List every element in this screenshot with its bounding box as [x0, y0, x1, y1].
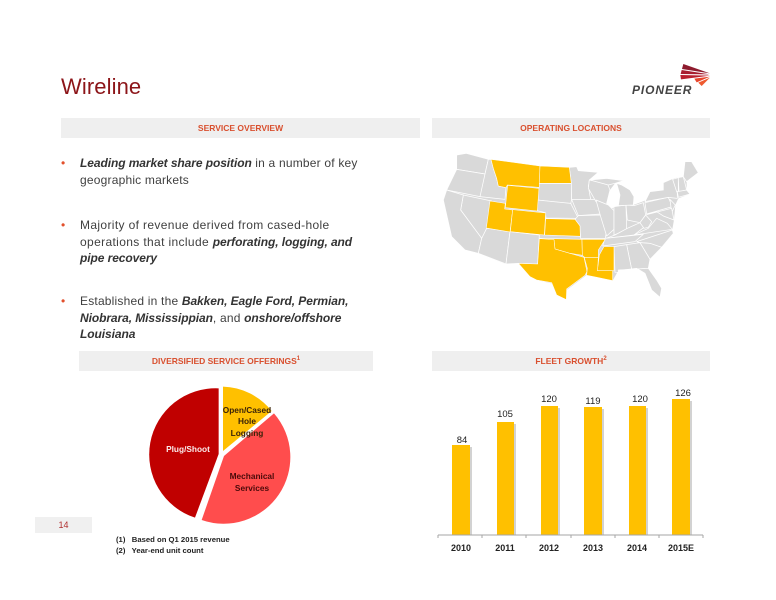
bar chart: fleet growth: 2012: [539, 543, 559, 553]
bar chart: fleet growth: 2013: [583, 543, 603, 553]
heading: service overview: SERVICE OVERVIEW: [198, 123, 283, 133]
bar chart: fleet growth: 2010: [451, 543, 471, 553]
bar chart: fleet growth: 2011: [495, 543, 515, 553]
footnotes: [116, 535, 230, 555]
pie chart: diversified service offerings: Open/Cased: [223, 405, 271, 415]
bar chart: fleet growth: 120: [541, 394, 557, 405]
pie chart: diversified service offerings: Plug/Shoot: [166, 444, 210, 454]
bar chart: fleet growth: 105: [497, 409, 513, 420]
footnotes: (1) Based on Q1 2015 revenue: [116, 535, 230, 544]
heading: diversified service offerings: DIVERSIFIED SERVICE OFFERINGS1: [152, 356, 300, 366]
bullet list: service overview: Majority of revenue derived from cased-hole: [80, 218, 330, 232]
pie chart: diversified service offerings: Services: [235, 483, 269, 493]
heading: diversified service offerings: [79, 351, 373, 371]
bullet list: service overview: operations that include perforating, logging, and: [80, 234, 352, 248]
bar chart: fleet growth: 84: [457, 435, 467, 446]
bar chart: fleet growth: 2015E: [668, 543, 694, 553]
bullet list: service overview: •: [61, 294, 65, 308]
pie chart: diversified service offerings: Mechanical: [230, 471, 274, 481]
bullet list: service overview: pipe recovery: [80, 251, 157, 265]
heading: service overview: [61, 118, 420, 138]
bullet list: service overview: Established in the Bakken, Eagle Ford, Permian,: [80, 294, 348, 308]
bullet list: service overview: Niobrara, Mississippian, and onshore/offshore: [80, 310, 341, 324]
bullet list: service overview: •: [61, 156, 65, 170]
bar chart: fleet growth: 126: [675, 388, 691, 399]
page number: [35, 517, 92, 533]
heading: fleet growth: FLEET GROWTH2: [535, 356, 607, 366]
bar chart: fleet growth: 120: [632, 394, 648, 405]
icon: Pioneer logo: PIONEER: [632, 83, 692, 97]
bullet list: service overview: •: [61, 218, 65, 232]
bar chart: fleet growth: 119: [585, 396, 601, 407]
heading: operating locations: [432, 118, 710, 138]
bullet list: service overview: geographic markets: [80, 172, 189, 186]
heading: fleet growth: [432, 351, 710, 371]
pie chart: diversified service offerings: Logging: [231, 428, 263, 438]
heading: operating locations: OPERATING LOCATIONS: [520, 123, 622, 133]
page number: 14: [58, 520, 68, 530]
bullet list: service overview: Louisiana: [80, 327, 135, 341]
title: Wireline: [61, 74, 141, 99]
bar chart: fleet growth: 2014: [627, 543, 647, 553]
bullet list: service overview: [61, 156, 358, 341]
bullet list: service overview: Leading market share position in a number of key: [80, 156, 358, 170]
footnotes: (2) Year-end unit count: [116, 546, 203, 555]
pie chart: diversified service offerings: Hole: [238, 416, 256, 426]
